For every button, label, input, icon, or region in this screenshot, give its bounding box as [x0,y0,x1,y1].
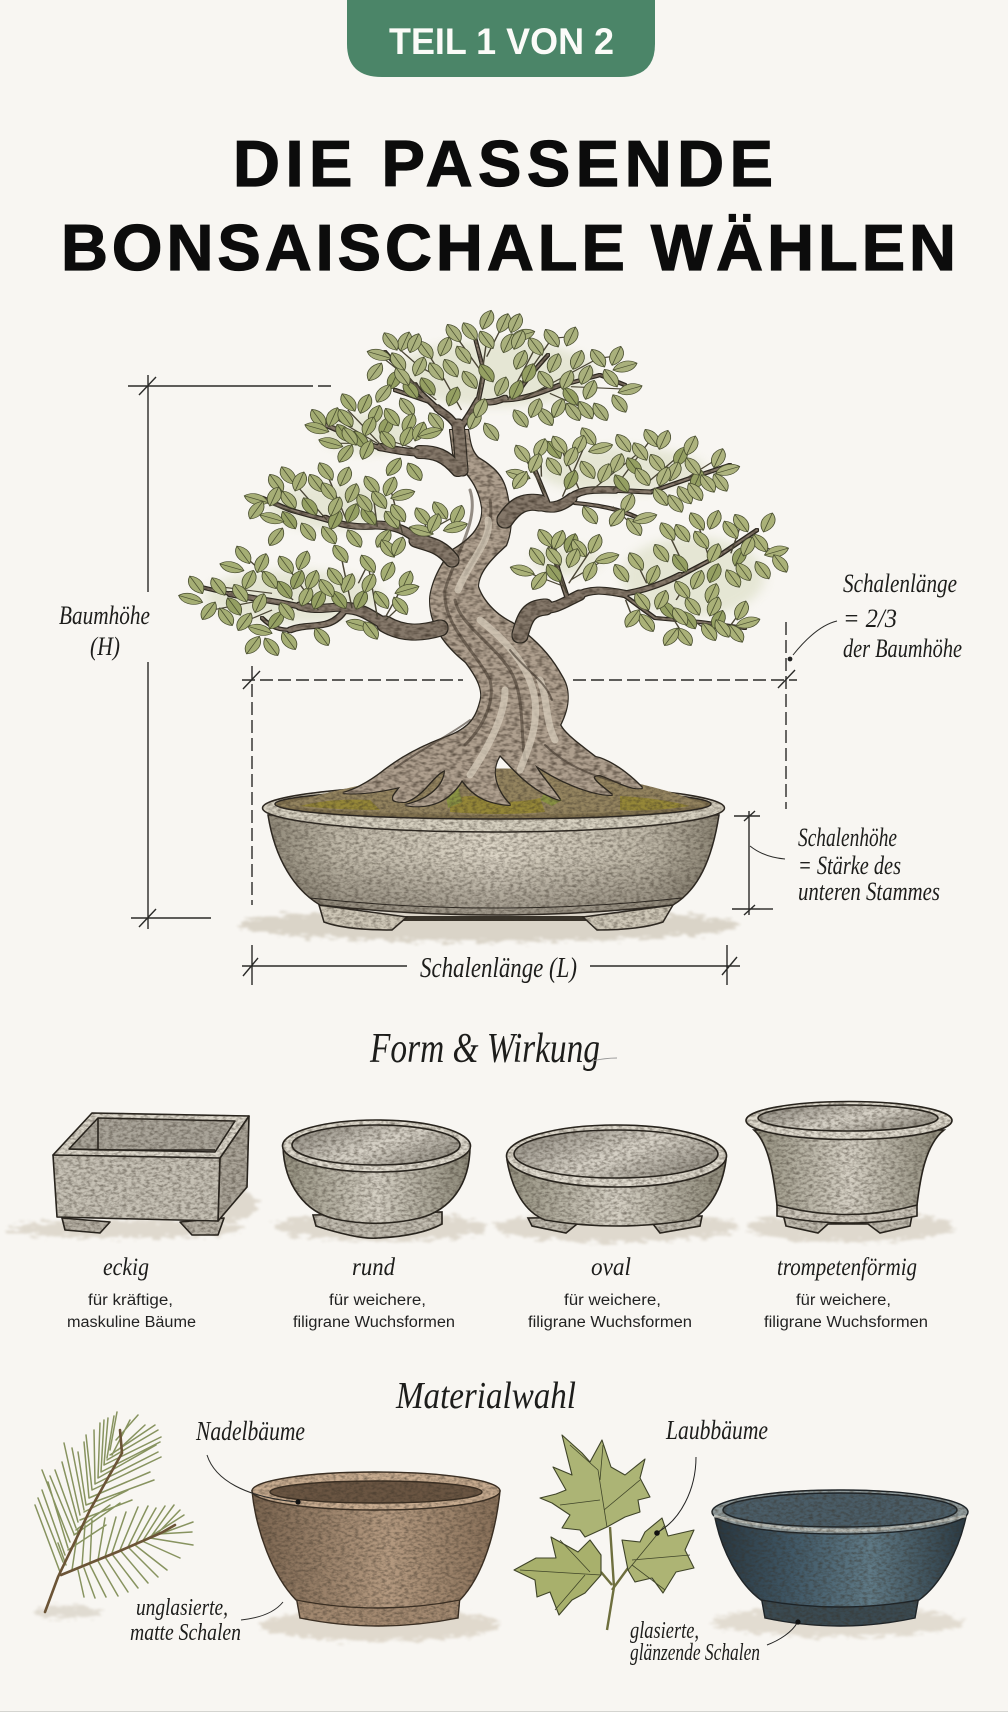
label: Schalenhöhe = Stärke des unteren Stammes: unteren Stammes [798,877,940,906]
ground shadow [238,908,738,942]
label: Baumhöhe (H): (H) [90,632,120,661]
label: Schalenlänge = 2/3 der Baumhöhe: der Baumhöhe [843,634,962,663]
shape labels [103,1254,917,1281]
pot rim [262,784,724,832]
leaves: inner fill [222,362,750,631]
label: Schalenhöhe = Stärke des unteren Stammes: = Stärke des [798,851,901,880]
label: unglasierte, matte Schalen: unglasierte, [136,1595,228,1621]
badge: Teil 1 von 2 [347,0,655,77]
icon: maple leaves [514,1435,694,1630]
shape labels: oval [591,1254,631,1281]
label: glasierte, glänzende Schalen: glänzende Schalen [630,1640,760,1666]
pot: unglazed terracotta [252,1472,500,1641]
soil and moss [278,768,708,815]
dimension lines around tree [128,375,837,985]
shape: trompetenförmig [746,1102,954,1242]
label: Schalenlänge = 2/3 der Baumhöhe: Schalenlänge [843,569,957,598]
title: DIE PASSENDE [233,127,773,200]
shape: oval [494,1125,738,1242]
twigs [209,323,776,637]
leader: Laubbäume to leaf [654,1457,696,1536]
leaves: middle left [242,460,470,560]
branches [192,330,757,635]
shape descriptions: für kräftige, [88,1292,173,1309]
label: Baumhöhe (H) [59,601,150,661]
label: Schalenlänge = 2/3 der Baumhöhe: = 2/3 [843,604,897,633]
foliage wash [205,340,765,623]
label: Schalenhöhe = Stärke des unteren Stammes: Schalenhöhe [798,823,897,852]
leaves: upper left [303,391,444,483]
label: Baumhöhe (H): Baumhöhe [59,601,150,630]
label: Laubbäume: Laubbäume [665,1415,768,1445]
shape: rund [274,1120,486,1241]
icon: pine branch [34,1412,193,1618]
shape labels: rund [352,1254,395,1281]
tree foliage [176,309,792,658]
heading: Form & Wirkung: Form & Wirkung [369,1026,600,1072]
shape descriptions: für weichere, [796,1292,891,1309]
leaves: top crown [363,309,644,443]
leader: Nadelbäume to pot [207,1455,301,1505]
leaves: upper right [504,425,742,538]
shape descriptions [67,1292,928,1331]
shape labels: eckig [103,1254,149,1281]
shape: eckig [7,1113,258,1238]
label: Schalenlänge = 2/3 der Baumhöhe [843,569,962,663]
shape descriptions: für weichere, [329,1292,426,1309]
label: glasierte, glänzende Schalen: glasierte, [630,1618,699,1644]
shape labels: trompetenförmig [777,1254,917,1281]
leaves: lower left [176,542,421,658]
title [61,127,956,284]
badge: Teil 1 von 2: TEIL 1 VON 2 [389,21,614,62]
shape descriptions: maskuline Bäume [67,1314,196,1331]
shape descriptions: für weichere, [564,1292,661,1309]
label: unglasierte, matte Schalen: matte Schalen [130,1620,241,1646]
heading: Materialwahl: Materialwahl [395,1375,576,1417]
pot feet [262,784,724,930]
pot body [268,815,719,915]
shape descriptions: filigrane Wuchsformen [293,1314,455,1331]
label: unglasierte, matte Schalen [130,1595,283,1646]
label: glasierte, glänzende Schalen [630,1618,801,1666]
pot: glazed blue [712,1490,968,1637]
title: BONSAISCHALE WÄHLEN [61,211,956,284]
main pot with bonsai [176,309,792,942]
shape descriptions: filigrane Wuchsformen [528,1314,692,1331]
trunk bark streaks [395,490,620,783]
label: Nadelbäume: Nadelbäume [195,1416,305,1446]
label: Schalenhöhe = Stärke des unteren Stammes [798,823,940,906]
roots and trunk [343,430,642,806]
label: Schalenlänge (L): Schalenlänge (L) [420,953,577,984]
leaves: lower right [508,509,792,648]
shape descriptions: filigrane Wuchsformen [764,1314,928,1331]
